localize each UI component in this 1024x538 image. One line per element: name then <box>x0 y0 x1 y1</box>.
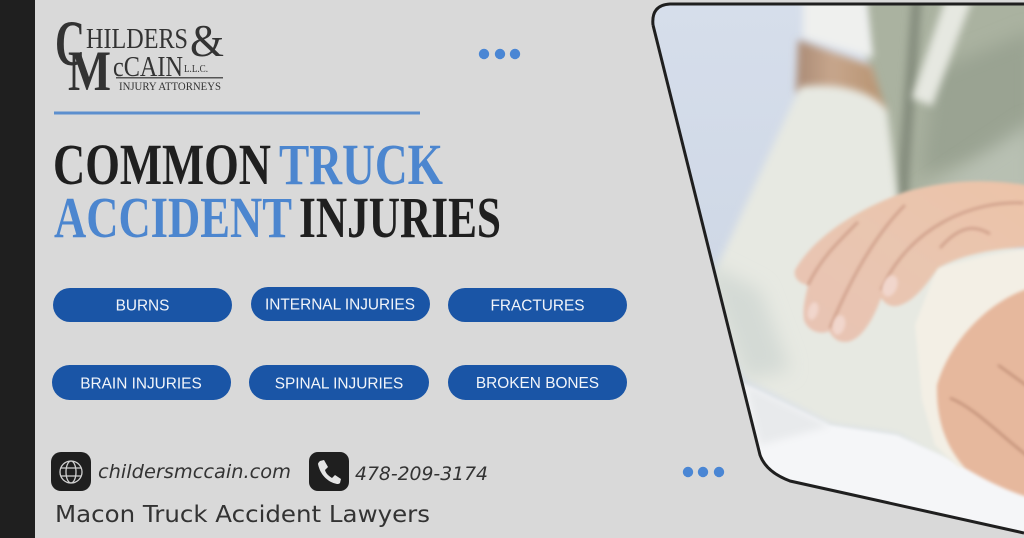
pill: brain injuries: BRAIN INJURIES <box>80 376 202 392</box>
cast cuff <box>915 248 1024 470</box>
website text: childersmccain.com <box>98 461 291 483</box>
upper and lower cast <box>700 85 1024 465</box>
large hand <box>795 181 1024 342</box>
cast shadow near frame <box>717 270 786 378</box>
pill: broken bones: BROKEN BONES <box>476 375 599 392</box>
dots: top <box>479 49 520 59</box>
heading: ACCIDENT <box>54 185 292 250</box>
upper arm <box>796 40 886 112</box>
pill: spinal injuries: SPINAL INJURIES <box>275 376 403 392</box>
heading: INJURIES <box>299 185 501 250</box>
pill: brain injuries <box>52 365 231 400</box>
pill: burns <box>53 288 232 322</box>
logo: Childers & McCain <box>55 8 224 103</box>
pill buttons <box>52 287 627 400</box>
heading <box>53 132 501 250</box>
logo: Childers & McCain: HILDERS <box>86 23 188 55</box>
icon: globe <box>51 452 91 491</box>
pill: spinal injuries <box>249 365 429 400</box>
logo: Childers & McCain: C <box>55 8 85 80</box>
gown <box>864 6 1024 196</box>
icon: phone <box>309 452 349 491</box>
pill: broken bones <box>448 365 627 400</box>
photo frame <box>653 4 1024 533</box>
small hand <box>937 288 1024 498</box>
sleeve <box>803 0 873 58</box>
pill: burns: BURNS <box>116 298 169 314</box>
pill: fractures: FRACTURES <box>490 298 585 314</box>
heading: COMMON <box>53 132 271 197</box>
phone text: 478-209-3174 <box>355 463 488 485</box>
logo: Childers & McCain: cCAIN <box>113 51 183 83</box>
tagline: Macon Truck Accident Lawyers <box>55 502 430 528</box>
heading rule <box>54 112 420 114</box>
pill: internal injuries: INTERNAL INJURIES <box>265 296 415 314</box>
logo: Childers & McCain: M <box>68 40 111 103</box>
heading: TRUCK <box>279 132 443 197</box>
photo: injured hand in cast <box>640 0 1024 538</box>
finger creases <box>808 203 1024 328</box>
logo: Childers & McCain: L.L.C. <box>184 64 208 75</box>
dots: bottom <box>683 467 724 477</box>
sheet <box>740 382 1024 538</box>
pill: fractures <box>448 288 627 322</box>
logo: Childers & McCain: & <box>190 15 224 66</box>
logo: Childers & McCain: INJURY ATTORNEYS <box>119 79 221 93</box>
pill: internal injuries <box>251 287 430 321</box>
finger nails <box>806 273 901 336</box>
left black bar <box>0 0 35 538</box>
